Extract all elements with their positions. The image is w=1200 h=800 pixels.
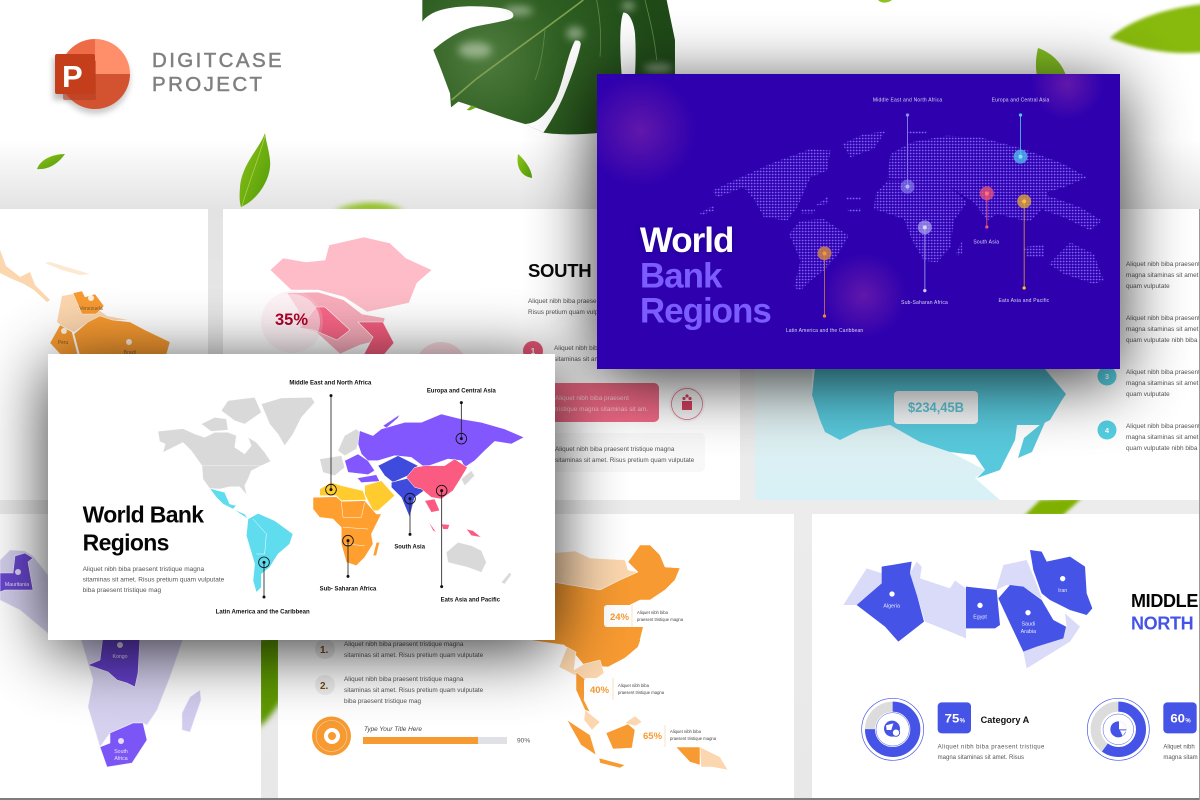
heading: Middle East: NORTH (1131, 613, 1193, 633)
callout: 24%: praesent tristique magna (637, 617, 684, 622)
map: dotted world (700, 131, 1104, 291)
list item 1: quam vulputate (1126, 283, 1170, 290)
list item 1 (1126, 261, 1200, 290)
map labels: Peru (58, 340, 68, 346)
icon: blurred leaf in middle gutter (1024, 498, 1082, 516)
pin: South Asia (973, 186, 999, 246)
text block: magna sitaminas sit amet. Risus (938, 755, 1024, 761)
pin: Europa and Central Asia (992, 97, 1050, 164)
text box (500, 433, 705, 472)
callout: pink circle (415, 342, 467, 394)
map: grey regions (158, 397, 511, 584)
text block: Aliquet nibh biba praesent tristique magna (83, 566, 204, 573)
list item 1 (315, 639, 484, 659)
pin: South Asia (394, 493, 426, 550)
pin: Europa and Central Asia: Europa and Central Asia (992, 97, 1050, 103)
text block: magna sitam (1163, 755, 1198, 761)
list item 2: Aliquet nibh biba praesent tristique magna (344, 676, 464, 683)
map: Middle East and North Africa: Egypt (973, 614, 987, 620)
stat: 60% (1163, 702, 1197, 733)
pin: Latin America and the Caribbean (786, 246, 863, 334)
text box: sitaminas sit amet. Risus pretium quam vulputate (555, 457, 695, 464)
icon: leaf behind blue slide (1036, 48, 1066, 76)
callout: 35% circle (261, 291, 323, 353)
panel: Russia slide (755, 209, 1200, 500)
icon: large leaf center (240, 133, 270, 207)
list item 4: 4 (1105, 426, 1110, 435)
list item 2: 2. (320, 681, 329, 692)
map pins (61, 295, 132, 345)
list item 1: Aliquet nibh biba praesent (1126, 261, 1200, 268)
background glows (584, 47, 1104, 339)
callout: pink box: Aliquet nibh biba praesent (555, 395, 629, 402)
pin: Latin America and the Caribbean (216, 557, 310, 615)
pin: Middle East and North Africa: Middle East and North Africa (289, 381, 372, 387)
title: Regions (83, 530, 169, 556)
progress bar: 90% (517, 738, 530, 744)
list item 4: quam vulputate nibh biba (1126, 445, 1198, 452)
text block (938, 745, 1045, 761)
text block (528, 298, 702, 316)
map: Middle East and North Africa (843, 550, 1092, 668)
list item 2: Aliquet nibh biba praesent (1126, 315, 1200, 322)
list item 4 (1098, 420, 1200, 452)
panel: white world map slide (48, 354, 555, 640)
map: Sub-Saharan Africa (313, 497, 381, 566)
icon: small leaf right of center (518, 154, 532, 178)
panel: South Asia slide (223, 209, 740, 500)
pin: South Asia: South Asia (394, 544, 426, 550)
title (640, 221, 771, 330)
icon: people in circle (669, 386, 705, 422)
map: Central and South America (0, 250, 170, 356)
panel: East Asia slide (278, 514, 794, 800)
brand name (152, 49, 284, 96)
map labels (58, 306, 136, 356)
list item 2 (315, 675, 484, 705)
list item 3: 3 (1105, 372, 1109, 381)
map: surrounding land (755, 368, 1010, 500)
list item 1: Aliquet nibh biba praesent tristique magna (344, 641, 464, 648)
text block (1163, 745, 1198, 761)
icon: small leaf left (37, 154, 65, 169)
map: Middle East and North Africa: Saudi (1022, 622, 1035, 628)
list item 4: Aliquet nibh biba praesent (1126, 423, 1200, 430)
title (83, 501, 204, 556)
icon: blurred leaf top right (1110, 4, 1200, 53)
pin: Sub-Saharan Africa: Sub- Saharan Africa (320, 587, 377, 593)
text box: Aliquet nibh biba praesent tristique magna (555, 446, 675, 453)
icon: blurred leaf peeking over slide (333, 203, 405, 212)
callout: value label (894, 391, 978, 424)
brand name: DIGITCASE (152, 49, 284, 72)
callout: pink box: tristique magna sitaminas sit am. (555, 406, 648, 413)
callout: 24%: 24% (610, 612, 630, 623)
map labels: Mauritania (5, 582, 29, 588)
pin: Europa and Central Asia: Europa and Central Asia (427, 388, 496, 394)
title: World (640, 221, 733, 260)
map labels: Africa (114, 756, 128, 762)
stat: 75% (938, 702, 971, 733)
list item 3: Aliquet nibh biba praesent (1126, 369, 1200, 376)
list item 2: quam vulputate nibh biba (1126, 337, 1198, 344)
map: North Africa and Middle East (320, 481, 395, 511)
heading: Middle East: MIDDLE (1131, 591, 1198, 611)
stat: 75%: 75 (945, 711, 960, 725)
callout: 65%: praesent tristique magna (670, 736, 717, 741)
list item 1: sitaminas sit amet. Risus pretium quam vulputate (344, 652, 484, 659)
pin: Middle East and North Africa: Middle East and North Africa (873, 97, 942, 103)
map: East Asia (530, 545, 728, 770)
list item 3 (1098, 366, 1200, 398)
list item 1: 1 (531, 347, 536, 356)
list item 2: sitaminas sit amet. Risus pretium quam vulputate (344, 687, 484, 694)
map: Africa (0, 550, 201, 767)
map: East Asia and Pacific (406, 459, 481, 537)
stat: 60%: 60 (1170, 711, 1185, 725)
map labels: Brazil (124, 350, 136, 356)
stat: 60%: % (1185, 718, 1191, 724)
panel: Africa slide (0, 514, 261, 800)
map labels (5, 582, 128, 762)
pin: South Asia: South Asia (973, 240, 999, 246)
callout: 40%: praesent tristique magna (618, 690, 665, 695)
map: Russia (812, 368, 1066, 478)
callout: 24%: Aliquet nibh biba (637, 610, 669, 615)
callout: 65% (637, 725, 722, 747)
map: Central and South Asia (270, 237, 432, 356)
callout: value label: $234,45B (908, 400, 964, 415)
title: World Bank (83, 501, 204, 527)
list item 1: 1. (320, 645, 329, 656)
pin: Middle East and North Africa (289, 381, 372, 495)
map labels: Venezuela (79, 306, 103, 312)
list item 1 (523, 341, 628, 363)
map: Middle East and North Africa: Iran (1058, 588, 1067, 594)
pin: Sub-Saharan Africa (901, 220, 948, 306)
pin: Sub-Saharan Africa (320, 535, 377, 593)
text block: Risus pretium quam vulputate (528, 309, 613, 316)
text block: Aliquet nibh (1163, 745, 1195, 751)
title: Bank (640, 256, 723, 295)
pin: Europa and Central Asia (427, 388, 496, 444)
list item 3: quam vulputate (1126, 391, 1170, 398)
title: World (640, 221, 733, 260)
logo: PowerPoint (50, 39, 132, 116)
callout: 40%: Aliquet nibh biba (618, 683, 650, 688)
frame lines at page edge (0, 798, 1200, 800)
map labels: Kongo (112, 654, 128, 660)
text block: Aliquet nibh biba praesent tristique magna sitaminas sit amet. (528, 298, 702, 305)
brand name: PROJECT (152, 72, 264, 96)
text block: sitaminas sit amet. Risus pretium quam vulputate (83, 576, 225, 583)
chart: 75% donut (862, 698, 924, 760)
list item 2: biba praesent tristique mag (344, 698, 422, 705)
text block: biba praesent tristique mag (83, 587, 161, 594)
panel: blue title slide (597, 74, 1120, 369)
callout: 35% circle: 35% (275, 310, 308, 329)
map labels: South (114, 749, 128, 755)
callout: 40% (584, 678, 670, 700)
text block: Aliquet nibh biba praesent tristique (938, 745, 1045, 751)
icon: monstera leaf (422, 0, 675, 134)
map pins (15, 569, 124, 744)
stat: 75%: % (960, 718, 966, 724)
map: South Asia (378, 456, 426, 517)
callout: 24% (604, 605, 690, 627)
chart: 60% donut (1087, 698, 1149, 760)
pin: East Asia and Pacific (436, 485, 501, 604)
pin: Latin America and the Caribbean: Latin America and the Caribbean (216, 609, 310, 615)
list item 1: Aliquet nibh biba praesent (554, 345, 628, 352)
callout: 40%: 40% (590, 685, 610, 696)
panel: Middle East slide (812, 514, 1200, 800)
pin: Sub-Saharan Africa: Sub-Saharan Africa (901, 300, 948, 306)
heading: South: SOUTH (528, 260, 591, 281)
pin: East Asia and Pacific: Eats Asia and Pacific (441, 598, 501, 604)
list item 2 (1126, 315, 1200, 344)
icon: progress badge (312, 716, 351, 756)
pin: East Asia and Pacific (998, 194, 1050, 304)
panel: Latin America slide (0, 209, 208, 500)
map: Middle East and North Africa: Algeria (883, 603, 900, 609)
progress bar: Type Your Title Here (364, 726, 422, 733)
icon: tiny leaf at the top edge (878, 0, 892, 3)
callout: pink box (500, 383, 659, 422)
callout: 65%: 65% (643, 731, 663, 742)
callout: 65%: Aliquet nibh biba (670, 729, 702, 734)
list item 1: sitaminas sit amet. (554, 356, 607, 363)
map: Europe and Central Asia (345, 414, 524, 483)
pin: East Asia and Pacific: Eats Asia and Pacific (999, 298, 1050, 304)
progress bar (363, 726, 530, 744)
icon: blurred leaf in lower gutter (256, 630, 282, 728)
pin: Latin America and the Caribbean: Latin America and the Caribbean (786, 328, 863, 334)
title: Regions (640, 291, 771, 330)
logo: PowerPoint: P (62, 59, 83, 94)
map: Latin America (210, 488, 293, 592)
text block (83, 566, 225, 594)
heading: Middle East (1131, 591, 1198, 633)
label: Category A: Category A (981, 715, 1030, 725)
pin: Middle East and North Africa (873, 97, 942, 194)
map: Middle East and North Africa: Arabia (1021, 629, 1036, 635)
